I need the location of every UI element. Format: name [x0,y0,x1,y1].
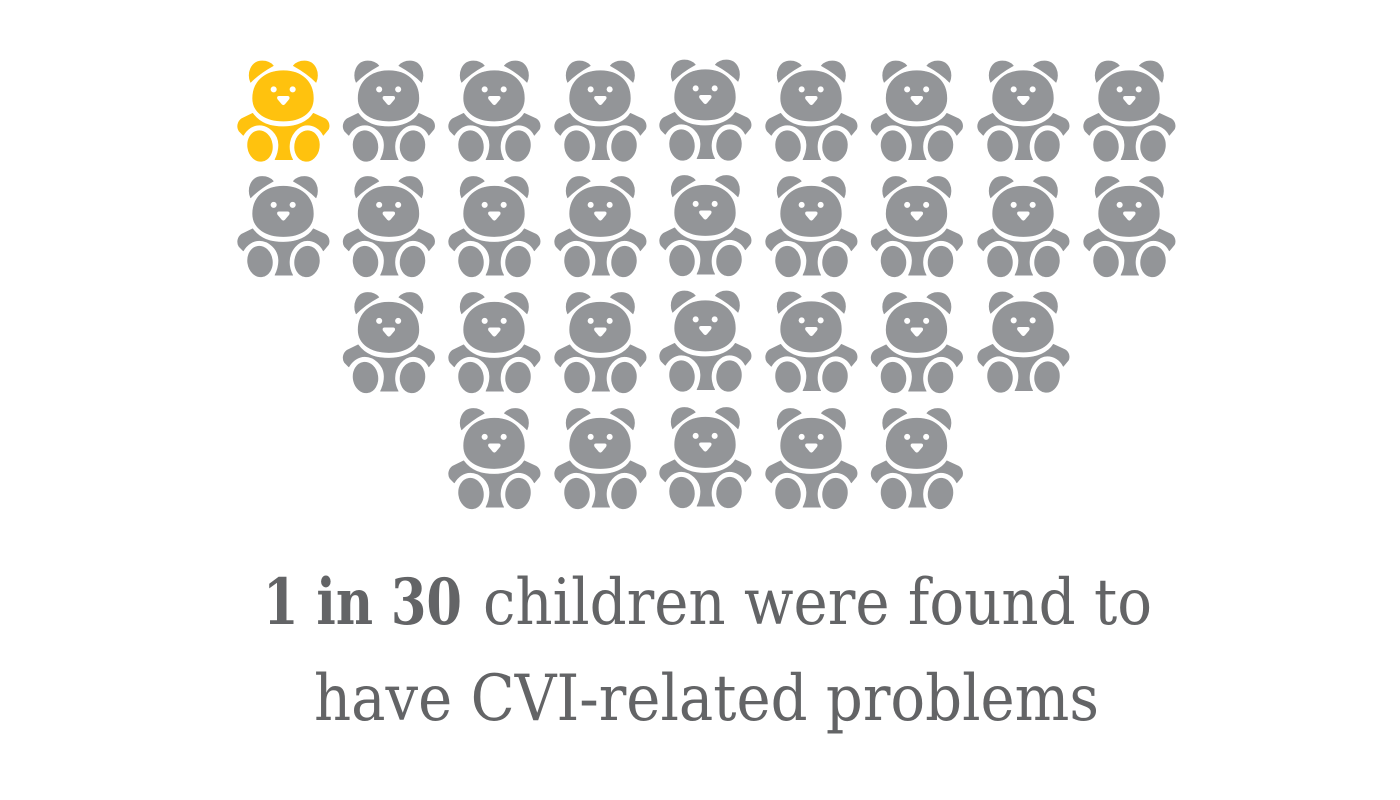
icon: grey bear [555,292,646,394]
icon: grey bear [555,61,646,163]
icon: grey bear [238,176,329,278]
row 4 of bears [449,407,963,510]
caption text [263,565,1152,736]
icon: grey bear [449,176,540,278]
caption line 1 remainder: children were found to [483,566,1152,640]
icon: grey bear [660,407,751,509]
icon: grey bear [766,176,857,278]
icon: grey bear [449,408,540,510]
icon: grey bear [871,408,963,510]
row 2 of bears [238,175,1175,278]
icon: grey bear [1084,61,1175,163]
icon: grey bear [1084,176,1175,278]
icon: grey bear [343,176,435,278]
icon: grey bear [978,176,1069,278]
icon: grey bear [871,292,963,394]
caption line 2: have CVI-related problems [314,662,1099,736]
icon: highlighted yellow bear [238,61,329,163]
icon: grey bear [978,61,1069,163]
icon: grey bear [766,61,857,163]
icon: grey bear [555,176,646,278]
row 3 of bears [343,291,1069,394]
icon: grey bear [660,60,751,162]
icon: grey bear [343,292,435,394]
caption line 1 bold figure: 1 in 30 [263,565,462,640]
icon: grey bear [660,175,751,277]
row 1 of bears [238,60,1175,163]
icon: grey bear [978,292,1069,394]
icon: grey bear [766,408,857,510]
icon: grey bear [449,292,540,394]
icon: grey bear [766,292,857,394]
icon: grey bear [660,291,751,393]
icon: grey bear [449,61,540,163]
icon: grey bear [871,176,963,278]
icon: grey bear [343,61,435,163]
icon: grey bear [871,61,963,163]
pictogram: 30 teddy bears [238,60,1175,510]
icon: grey bear [555,408,646,510]
